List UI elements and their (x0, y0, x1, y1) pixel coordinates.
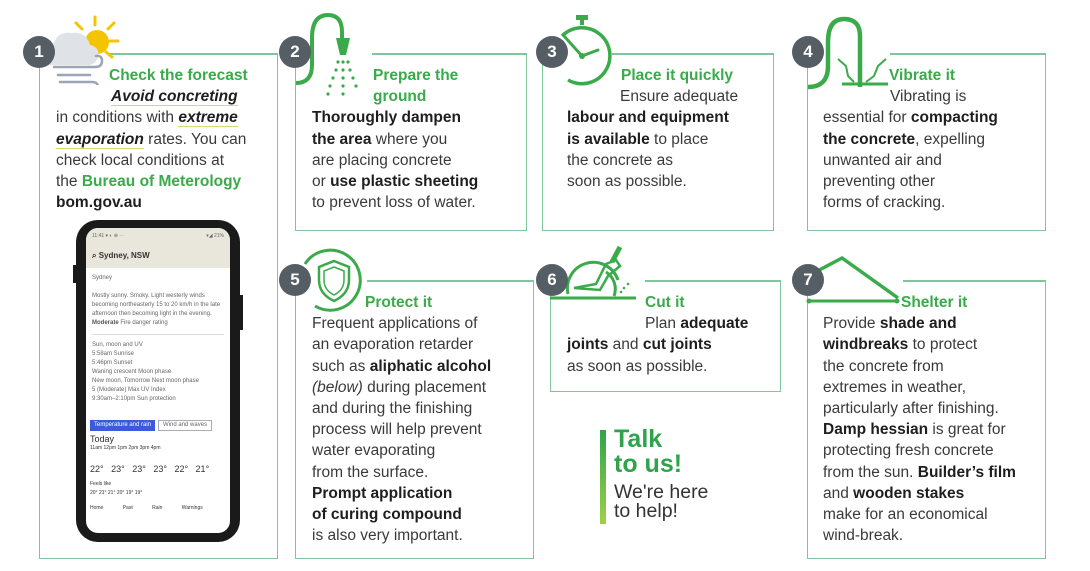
icon: cloud sun wind (48, 16, 120, 85)
text: panel 1: check local conditions at (56, 152, 224, 169)
text: panel 3: Place it quickly (621, 67, 733, 84)
text: panel 4: unwanted air and (823, 152, 942, 169)
text: panel 5: (below) during placement (312, 379, 486, 396)
phone screenshot: 5:58am Sunrise (92, 351, 134, 357)
text: panel 7: protecting fresh concrete (823, 442, 994, 459)
badge 5 (279, 264, 311, 296)
text: panel 7 (823, 294, 1016, 544)
badge 5: 5 (290, 270, 300, 289)
phone screenshot: Temperature and rain (94, 422, 151, 428)
text: panel 5: and during the finishing (312, 400, 472, 417)
icon: shelter (806, 256, 900, 304)
badge 4 (792, 36, 824, 68)
callout: talk to us: We're here (614, 481, 708, 503)
phone screenshot: 5 (Moderate) Max UV Index (92, 387, 166, 393)
text: panel 1: Check the forecast (109, 67, 248, 84)
text: panel 5: water evaporating (312, 442, 435, 459)
text: panel 6 (566, 294, 748, 375)
text: panel 2: Prepare the (373, 67, 458, 84)
text: panel 3 (567, 67, 738, 190)
text: panel 1 (56, 67, 248, 211)
badge 3: 3 (547, 42, 557, 61)
text: panel 1: Avoid concreting (111, 88, 238, 105)
callout: talk to us: Talk (614, 425, 662, 453)
text: panel 2: the area where you (312, 131, 447, 148)
text: panel 3: is available to place (567, 131, 708, 148)
badge 2: 2 (290, 42, 300, 61)
phone screenshot: 5:46pm Sunset (92, 360, 132, 366)
panel: 5 protect it (295, 280, 534, 559)
text: panel 6: Cut it (645, 294, 685, 311)
text: panel 3: labour and equipment (567, 109, 729, 126)
text: panel 7: from the sun. Builder’s film (823, 464, 1016, 481)
phone screenshot: Home Past Rain Warnings (90, 505, 203, 511)
badge 6: 6 (547, 270, 557, 289)
icon: vibrator poker (808, 16, 888, 90)
text: panel 3: soon as possible. (567, 173, 687, 190)
text: panel 3: the concrete as (567, 152, 673, 169)
text: panel 7: and wooden stakes (823, 485, 964, 502)
text: panel 4: preventing other (823, 173, 935, 190)
text: panel 7: Provide shade and (823, 315, 957, 332)
badge 6 (536, 264, 568, 296)
text: panel 2: ground (373, 88, 426, 105)
callout: talk to us: to us! (614, 450, 682, 478)
phone screenshot: 11am 12pm 1pm 2pm 3pm 4pm (90, 445, 160, 451)
badge 3 (536, 36, 568, 68)
text: panel 4: Vibrating is (890, 88, 966, 105)
text: panel 5 (312, 294, 491, 544)
text: panel 1: in conditions with extreme (56, 109, 238, 126)
text: panel 7: windbreaks to protect (823, 336, 977, 353)
phone screenshot: 20° 21° 21° 20° 19° 19° (90, 490, 142, 496)
text: panel 4: forms of cracking. (823, 194, 945, 211)
panel: 3 place it quickly (542, 53, 774, 231)
text: panel 5: is also very important. (312, 527, 463, 544)
text: panel 4: essential for compacting (823, 109, 998, 126)
badge 1 (23, 36, 55, 68)
text: panel 2: to prevent loss of water. (312, 194, 476, 211)
phone screenshot: 22° 23° 23° 23° 22° 21° (90, 464, 209, 474)
text: panel 2: Thoroughly dampen (312, 109, 461, 126)
text: panel 1: bom.gov.au (56, 194, 142, 211)
icon: stopwatch (560, 15, 612, 86)
icon: shield (304, 248, 362, 312)
phone screenshot: Sun, moon and UV (92, 342, 143, 348)
text: panel 4: Vibrate it (889, 67, 955, 84)
phone screenshot: New moon, Tomorrow Next moon phase (92, 378, 199, 384)
panel: 7 shelter it (807, 280, 1046, 559)
icon: hose spray (296, 13, 358, 96)
text: panel 1: evaporation rates. You can (56, 131, 246, 148)
phone screenshot: 9:30am–2:10pm Sun protection (92, 396, 176, 402)
text: panel 2: or use plastic sheeting (312, 173, 478, 190)
phone screenshot: Sydney (92, 275, 112, 281)
text: panel 6: joints and cut joints (567, 336, 712, 353)
callout: talk to us (600, 425, 708, 524)
text: panel 5: Frequent applications of (312, 315, 477, 332)
text: panel 1: the Bureau of Meterology (56, 173, 241, 190)
badge 1: 1 (34, 42, 44, 61)
text: panel 5: such as aliphatic alcohol (312, 358, 491, 375)
text: panel 6: Plan adequate (645, 315, 748, 332)
phone screenshot: 11:41 ▾ ◐ ⊕ ⋯ (92, 233, 124, 239)
text: panel 2: are placing concrete (312, 152, 452, 169)
text: panel 4: the concrete, expelling (823, 131, 985, 148)
text: panel 5: of curing compound (312, 506, 462, 523)
text: panel 5: process will help prevent (312, 421, 482, 438)
phone screenshot: Mostly sunny. Smoky. Light westerly winds becoming northeasterly 15 to 20 km/h in the late afternoon then becoming light in the evening. (92, 293, 220, 317)
badge 7: 7 (803, 270, 813, 289)
callout: talk to us: to help! (614, 500, 678, 522)
phone screenshot: ▾◢ 21% (206, 233, 224, 239)
text: panel 5: Prompt application (312, 485, 452, 502)
text: panel 5: from the surface. (312, 464, 428, 481)
text: panel 7: Shelter it (901, 294, 967, 311)
panel: 1 check the forecast (39, 53, 278, 559)
panel: 6 cut it (550, 280, 781, 392)
badge 2 (279, 36, 311, 68)
phone screenshot: Wind and waves (163, 422, 207, 428)
text: panel 7: particularly after finishing. (823, 400, 999, 417)
text: panel 7: extremes in weather, (823, 379, 966, 396)
text: panel 7: Damp hessian is great for (823, 421, 1006, 438)
text: panel 3: Ensure adequate (620, 88, 738, 105)
text: panel 4 (823, 67, 998, 211)
phone screenshot: Moderate Fire danger rating (92, 320, 168, 326)
badge 4: 4 (803, 42, 813, 61)
phone screenshot: Waning crescent Moon phase (92, 369, 171, 375)
phone screenshot: Feels like (90, 481, 111, 487)
text: panel 5: an evaporation retarder (312, 336, 473, 353)
icon: concrete saw (550, 246, 636, 300)
badge 7 (792, 264, 824, 296)
text: panel 2 (312, 67, 478, 211)
text: panel 5: Protect it (365, 294, 432, 311)
text: panel 6: as soon as possible. (567, 358, 707, 375)
panel: 4 vibrate it (807, 53, 1046, 231)
text: panel 7: the concrete from (823, 358, 944, 375)
phone screenshot: Today (90, 434, 114, 444)
text: panel 7: make for an economical (823, 506, 988, 523)
phone screenshot: ⌕ Sydney, NSW (92, 251, 150, 260)
phone screenshot (76, 220, 240, 542)
panel: 2 prepare the ground (295, 53, 527, 231)
text: panel 7: wind-break. (823, 527, 903, 544)
